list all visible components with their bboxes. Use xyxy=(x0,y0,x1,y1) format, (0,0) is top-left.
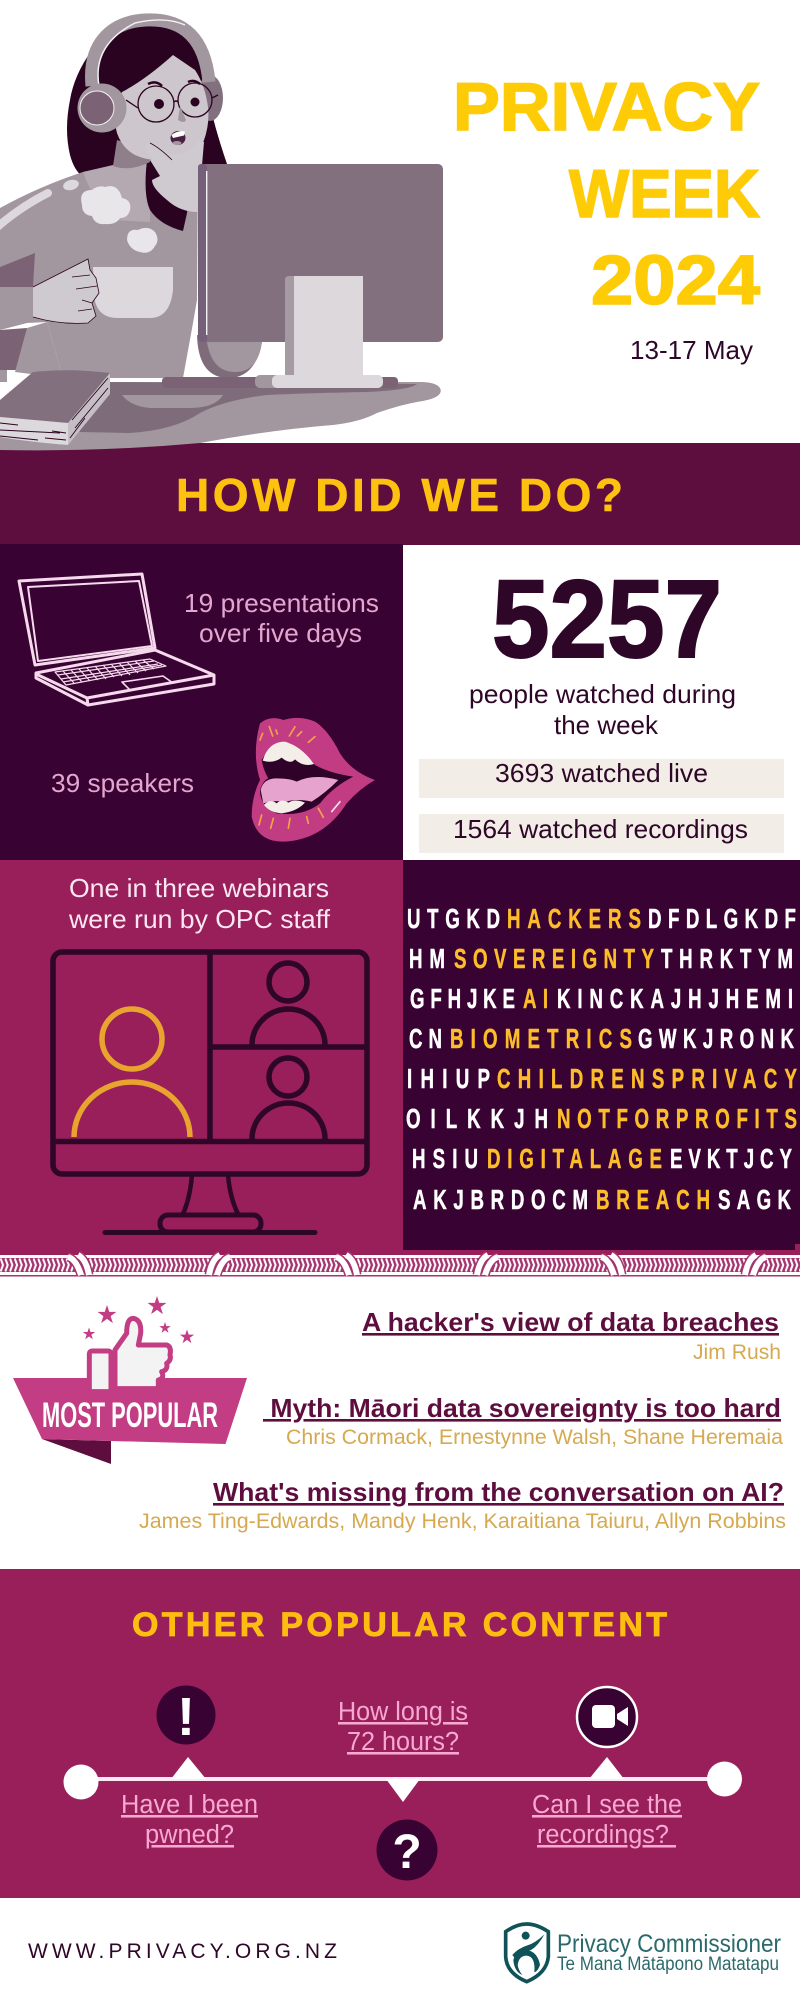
mouth xyxy=(169,130,187,146)
link: can I see the recordings: recordings? xyxy=(537,1821,676,1849)
logo: privacy commissioner: Te Mana Mātāpono Matatapu xyxy=(557,1954,779,1975)
icon: question mark: ? xyxy=(392,1826,422,1879)
icon: open mouth xyxy=(252,718,375,842)
neck xyxy=(113,140,150,168)
monitor stand xyxy=(285,276,363,376)
icon: thumbs up xyxy=(89,1318,170,1392)
glasses and eyes xyxy=(126,83,218,122)
monitor xyxy=(198,164,443,342)
stars xyxy=(83,1296,194,1343)
face xyxy=(115,55,208,160)
link: can I see the recordings: Can I see the xyxy=(532,1791,682,1819)
text: presentations xyxy=(184,588,379,648)
word search letters: HACKERS xyxy=(507,903,641,934)
timeline xyxy=(64,1757,742,1802)
badge: most popular xyxy=(13,1296,247,1464)
word search letters: OILKKJH xyxy=(406,1103,548,1134)
text: presentations: over five days xyxy=(199,618,362,648)
title: privacy week 2024: WEEK xyxy=(569,156,760,232)
panel: other popular content xyxy=(0,1569,800,1898)
stand base bar xyxy=(162,377,398,388)
heading: other popular content: OTHER POPULAR CONTENT xyxy=(132,1606,667,1644)
stat: watched live xyxy=(419,758,784,798)
right ear cup xyxy=(197,75,223,121)
ribbon fold xyxy=(42,1439,111,1464)
link: how long is 72 hours: 72 hours? xyxy=(347,1728,459,1756)
icon: video camera xyxy=(577,1687,637,1747)
heading: how did we do: HOW DID WE DO? xyxy=(176,469,623,521)
panel: webinars run by OPC staff xyxy=(0,860,403,1254)
text: people watched xyxy=(469,679,736,740)
word search letters: GFHJKE xyxy=(410,983,515,1014)
word search letters: KINCKAJHJHEMI xyxy=(557,983,793,1014)
stat: watched live: 3693 watched live xyxy=(495,758,708,788)
word search letters: DFDLGKDF xyxy=(648,903,796,934)
text: one in three: One in three webinars xyxy=(69,875,329,903)
torso and arm xyxy=(0,165,198,378)
word search letters: EVKTJCY xyxy=(670,1143,792,1174)
word search letters: BREACH xyxy=(596,1184,710,1215)
session: conversation on AI: What's missing from the conversation on AI? xyxy=(213,1477,784,1507)
session: Māori data sovereignty xyxy=(263,1393,783,1449)
word search letters: DIGITALAGE xyxy=(487,1143,662,1174)
hair xyxy=(67,23,227,176)
text: speakers: 39 speakers xyxy=(51,768,194,798)
badge label: MOST POPULAR xyxy=(42,1396,218,1435)
panel: word search xyxy=(403,860,800,1250)
word search letters: HSIU xyxy=(412,1143,478,1174)
word search letters: IHIUP xyxy=(407,1063,490,1094)
panel: how did we do banner xyxy=(0,443,800,545)
text: presentations: 19 presentations xyxy=(184,588,379,618)
big number: 5257 xyxy=(492,558,722,681)
book xyxy=(0,370,110,423)
word search letters: NOTFORPROFITS xyxy=(557,1103,797,1134)
text: people watched: people watched during xyxy=(469,679,736,709)
word search letters: AKJBRDOCM xyxy=(413,1184,588,1215)
word search letters: AI xyxy=(523,983,548,1014)
link: have I been pwned: Have I been xyxy=(121,1791,258,1819)
session: conversation on AI xyxy=(139,1477,786,1533)
link: have I been pwned: pwned? xyxy=(145,1821,234,1849)
headband xyxy=(92,20,209,86)
icon: question mark xyxy=(376,1820,438,1880)
text: people watched: the week xyxy=(554,710,659,740)
word search letters: HM xyxy=(409,943,445,974)
title: privacy week 2024 xyxy=(453,69,760,319)
session: Māori data sovereignty: Chris Cormack, Ernestynne Walsh, Shane Heremaia xyxy=(286,1426,783,1449)
ribbon xyxy=(13,1378,247,1444)
link: how long is 72 hours: How long is xyxy=(338,1698,468,1726)
hand holding cup xyxy=(33,259,99,323)
word search letters: BIOMETRICS xyxy=(450,1023,632,1054)
word search letters: UTGKD xyxy=(407,903,500,934)
left ear cup xyxy=(78,84,126,132)
lower hair behind hand xyxy=(146,160,192,231)
session: hacker's view: A hacker's view of data breaches xyxy=(362,1307,779,1337)
title: privacy week 2024: 2024 xyxy=(591,241,760,319)
logo: privacy commissioner xyxy=(506,1924,781,1982)
text: one in three: were run by OPC staff xyxy=(68,906,331,934)
word search letters: SAGK xyxy=(718,1184,791,1215)
word search letters: CN xyxy=(409,1023,442,1054)
stat: watched recordings xyxy=(419,814,784,853)
session: hacker's view xyxy=(362,1307,781,1364)
panel: 5257 viewers xyxy=(419,558,784,853)
session: hacker's view: Jim Rush xyxy=(693,1341,781,1364)
text: one in three xyxy=(68,875,331,934)
word search letters: CHILDRENSPRIVACY xyxy=(497,1063,797,1094)
link: can I see the recordings xyxy=(532,1791,682,1849)
word search letters: SOVEREIGNTY xyxy=(454,943,654,974)
desk xyxy=(0,382,441,450)
word search letters: GWKJRONK xyxy=(638,1023,794,1054)
stat: watched recordings: 1564 watched recordings xyxy=(453,814,748,844)
illustration: woman at computer xyxy=(0,20,443,450)
dates: 13-17 May xyxy=(630,335,753,365)
clouds on sweater xyxy=(81,186,130,224)
link: how long is 72 hours xyxy=(338,1698,468,1756)
logo text: Privacy Commissioner xyxy=(557,1930,781,1958)
thinking hand xyxy=(147,142,204,212)
session: conversation on AI: James Ting-Edwards, Mandy Henk, Karaitiana Taiuru, Allyn Robbins xyxy=(139,1510,786,1533)
panel: presentations and speakers xyxy=(0,544,403,860)
icon: laptop xyxy=(19,574,214,705)
icon: exclamation: ! xyxy=(177,1687,195,1747)
rope divider xyxy=(0,1250,800,1276)
icon: video call monitor xyxy=(53,952,367,1232)
word search letters: THRKTYM xyxy=(661,943,793,974)
session: Māori data sovereignty: Myth: Māori data sovereignty is too hard xyxy=(263,1393,781,1423)
word search letters xyxy=(406,903,797,1215)
link: have I been pwned xyxy=(121,1791,258,1849)
icon: exclamation xyxy=(156,1686,216,1747)
logo shield xyxy=(506,1924,548,1982)
title: privacy week 2024: PRIVACY xyxy=(453,69,760,145)
chair arm behind screen xyxy=(197,335,262,378)
coffee cup xyxy=(93,267,173,318)
footer website: WWW.PRIVACY.ORG.NZ xyxy=(28,1940,337,1963)
